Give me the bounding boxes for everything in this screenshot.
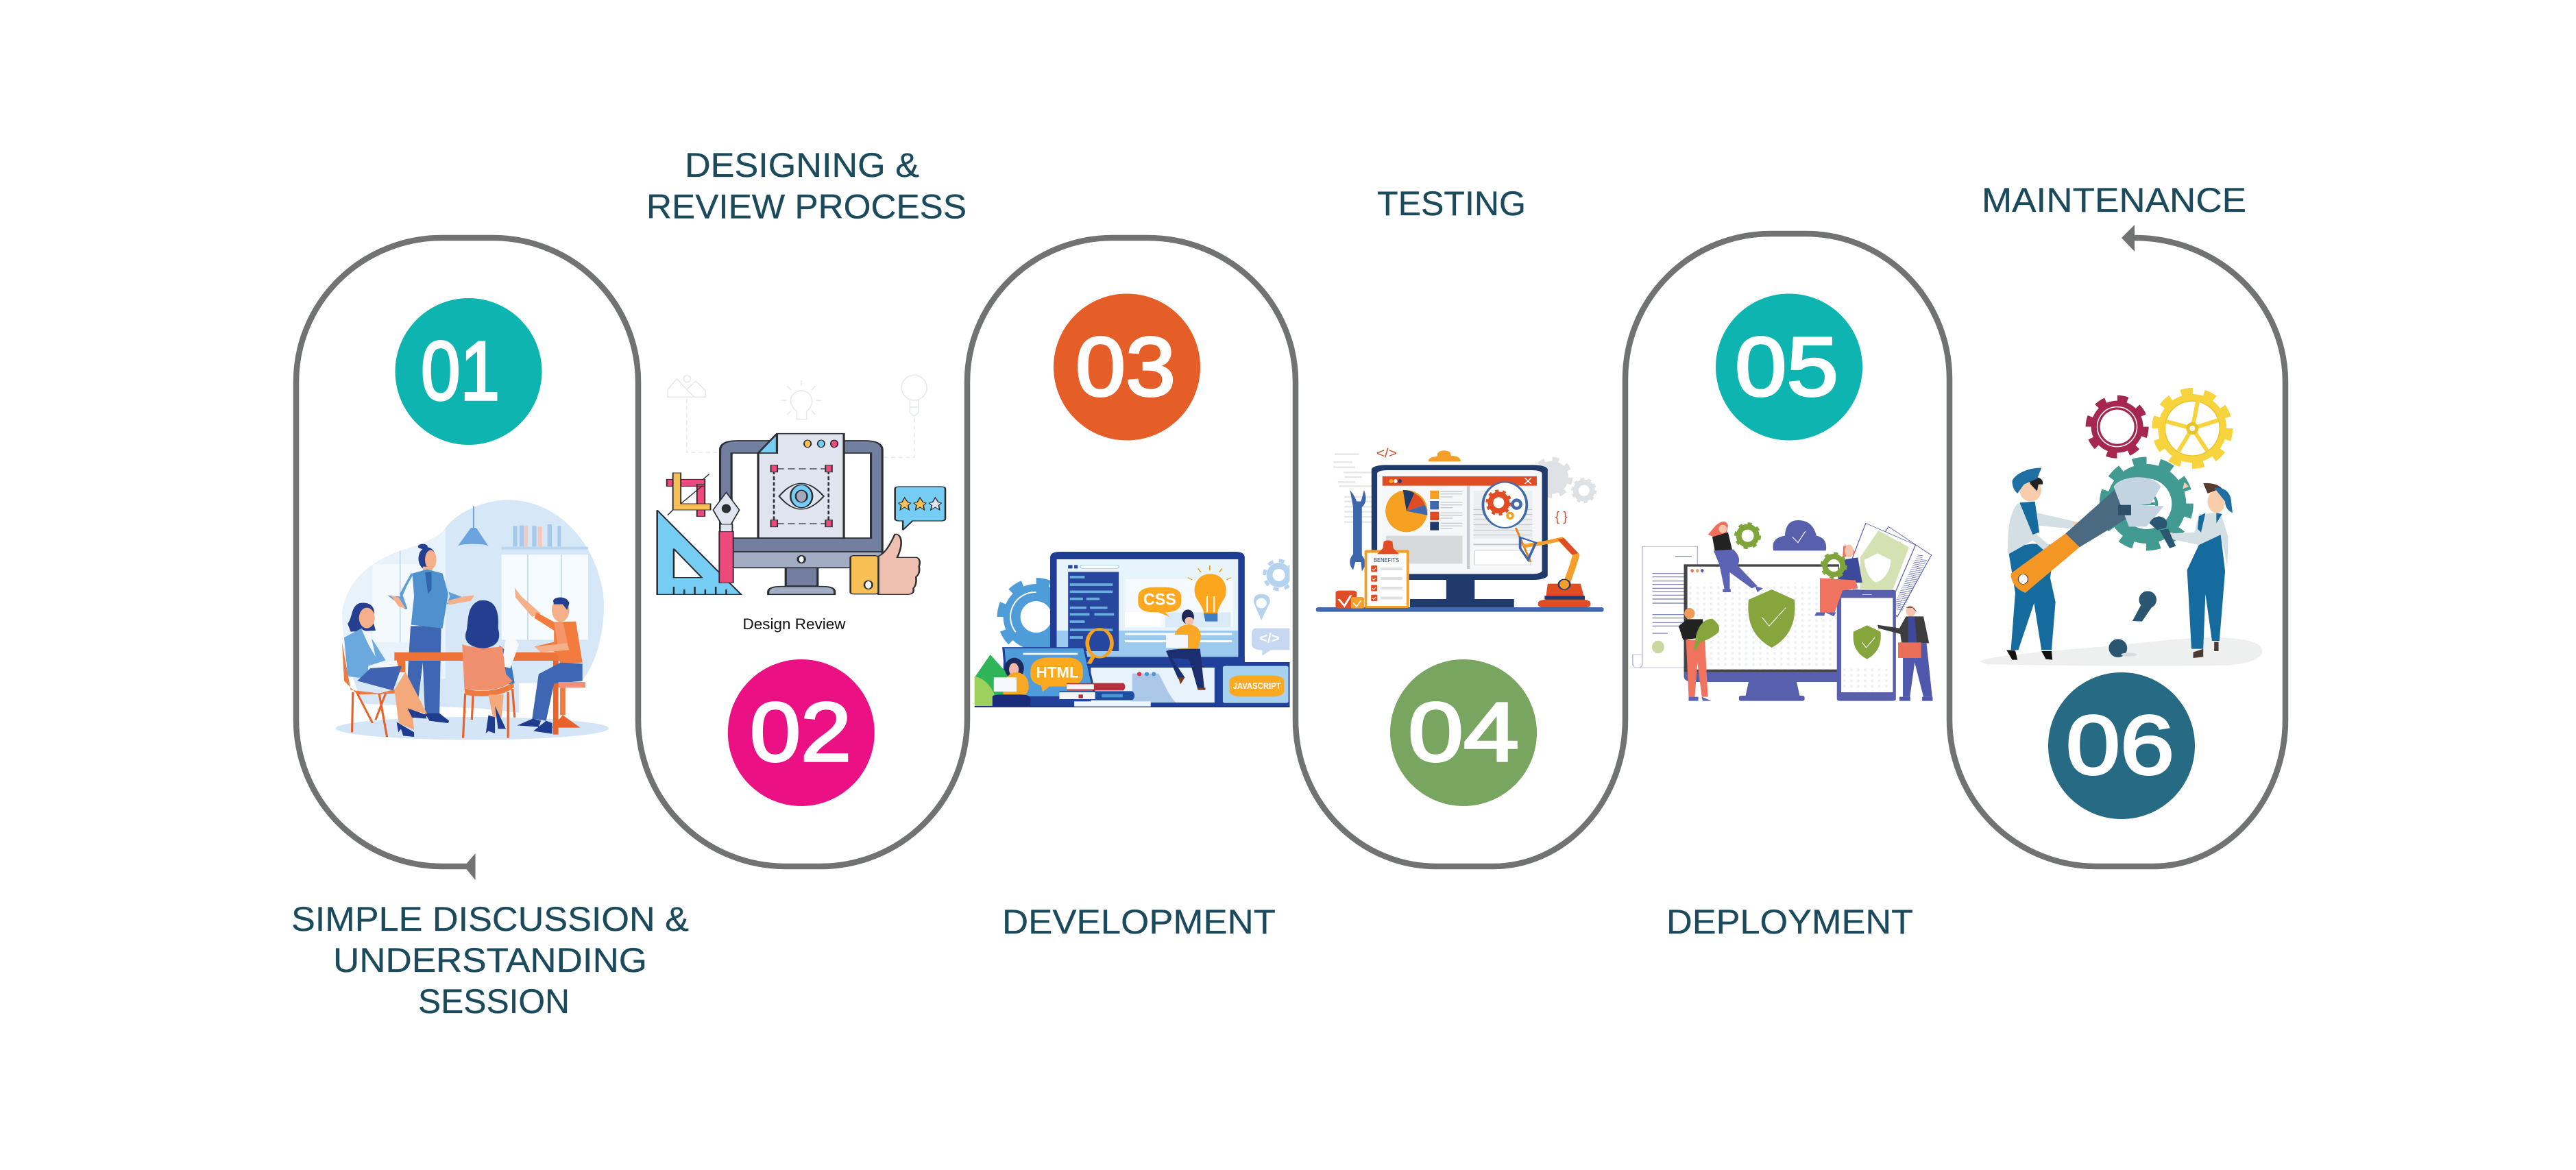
illustration: software testing: [1316, 446, 1603, 612]
thumbs up: [851, 534, 920, 594]
code symbols: [1376, 446, 1568, 524]
monitor: [720, 441, 882, 594]
step 01 badge: [395, 298, 542, 445]
woman left with notebook: [342, 602, 427, 737]
monitor: [1050, 552, 1245, 663]
right worker: [2163, 482, 2233, 658]
giant wrench: [2011, 477, 2164, 593]
desktop monitor: [1684, 564, 1839, 701]
caption: design review: Design Review: [743, 616, 846, 633]
faint idea icons with dashed connectors: [668, 375, 927, 457]
step 05 badge: 05: [1735, 320, 1838, 413]
crop tool: [667, 473, 711, 516]
heading: testing: TESTING: [1377, 184, 1526, 223]
shelf: [1316, 607, 1603, 612]
clipboard: [1365, 540, 1409, 608]
cloud with check: [1773, 520, 1826, 550]
man with gear on phone: [1814, 545, 1862, 616]
standing man: [391, 544, 474, 724]
cloud upload: [1429, 450, 1461, 461]
scroll document: [1633, 546, 1697, 668]
set square: [657, 510, 741, 594]
person holding a key: [1679, 608, 1719, 701]
lower desk band: [975, 657, 1290, 707]
heading: simple discussion: SIMPLE DISCUSSION &: [291, 900, 689, 938]
css bubble and bulb: CSS: [1143, 591, 1176, 609]
woman with gear sitting on monitor: [1708, 522, 1763, 592]
heading: simple discussion: [291, 900, 689, 1021]
illustration: maintenance crew with wrench: [1979, 392, 2262, 666]
javascript tablet: [1223, 666, 1289, 703]
illustration: team discussion at a table: [336, 500, 609, 740]
step 03 badge: 03: [1076, 320, 1176, 413]
faint code lines: [1333, 454, 1373, 522]
step 05 badge: [1716, 293, 1862, 440]
pen: [713, 492, 740, 583]
step 01 badge: 01: [421, 324, 500, 417]
clipboard: BENEFITS: [1374, 557, 1399, 563]
heading: designing and review: REVIEW PROCESS: [646, 188, 967, 226]
maroon gear: [2089, 399, 2146, 455]
screws: [2109, 516, 2176, 657]
light gears and pin behind the monitor: [1001, 561, 1293, 656]
woman centre seen from behind: [462, 600, 519, 738]
man raising his hand: [515, 587, 585, 734]
magnifying glass with gears: [1483, 482, 1531, 562]
step 04 badge: [1390, 659, 1537, 806]
monitor: [1372, 465, 1548, 608]
javascript tablet: JAVASCRIPT: [1233, 681, 1281, 691]
paper with eye and selection marks: [758, 434, 844, 538]
heading: development: DEVELOPMENT: [1002, 903, 1276, 941]
documents behind phone: [1853, 523, 1932, 617]
heading: designing and review: DESIGNING &: [685, 146, 919, 184]
winding process path with start and end arrowheads: [296, 225, 2285, 880]
woman with laptop and plant: [975, 655, 1030, 706]
gray gears: [1533, 459, 1596, 502]
step 04 badge: 04: [1408, 685, 1519, 779]
illustration: web development: [975, 552, 1293, 707]
step 03 badge: [1054, 293, 1200, 440]
step 06 badge: [2048, 672, 2195, 819]
yellow gear: [2156, 392, 2228, 465]
ground shadow: [1979, 637, 2262, 666]
code symbols: </>: [1376, 446, 1397, 461]
step 06 badge: 06: [2066, 698, 2174, 792]
heading: designing and review: [646, 146, 967, 226]
heading: maintenance: MAINTENANCE: [1982, 181, 2246, 219]
table: [394, 653, 565, 735]
check blocks: [1336, 591, 1364, 609]
step 02 badge: [728, 659, 875, 806]
laptop with html: HTML: [1036, 663, 1079, 681]
laptop with html: [1004, 648, 1095, 697]
left worker: [2006, 468, 2081, 660]
magnifying glass: [1087, 629, 1112, 663]
phone: [1837, 590, 1896, 701]
sitting developer: [1166, 609, 1205, 690]
stacked books: [1059, 683, 1134, 700]
heading: deployment: DEPLOYMENT: [1666, 903, 1913, 941]
illustration: secure deployment: [1633, 520, 1932, 701]
heading: simple discussion: SESSION: [418, 982, 570, 1021]
wrench: [1350, 490, 1366, 571]
code bracket on bubble: </>: [1259, 631, 1280, 646]
speech bubble with rating stars: [895, 487, 945, 530]
css bubble and bulb: [1138, 565, 1231, 622]
code symbols: { }: [1555, 510, 1568, 524]
step 02 badge: 02: [750, 685, 851, 779]
robot arm: [1520, 537, 1590, 608]
man with briefcase: [1878, 606, 1932, 701]
teal gear: [2104, 461, 2189, 546]
illustration: design review monitor: [657, 375, 945, 633]
pie chart and legend: [1385, 490, 1462, 532]
heading: simple discussion: UNDERSTANDING: [333, 941, 647, 979]
